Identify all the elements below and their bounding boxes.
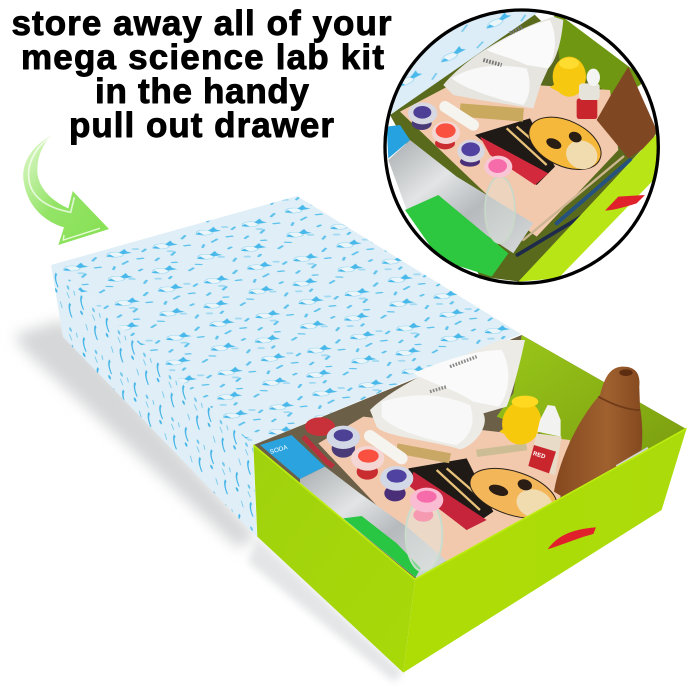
inset purple pot <box>457 140 485 167</box>
green pack <box>343 516 421 577</box>
drawer right face <box>403 428 687 673</box>
sleeve top face <box>51 196 521 445</box>
inset paint pots <box>408 102 512 178</box>
inset yellow pot <box>550 57 586 97</box>
inset white background outside drawer <box>547 172 670 290</box>
inset peach sheet <box>400 80 618 237</box>
inset volcano <box>597 67 657 158</box>
heading: pull out drawer <box>69 106 334 145</box>
inset skull <box>528 116 602 170</box>
inset pink pot <box>484 156 512 178</box>
inset paintbrushes <box>517 157 630 255</box>
inset contents <box>387 12 657 282</box>
inset blue card <box>387 125 410 158</box>
inset dark base <box>390 13 657 282</box>
inset white tube <box>445 107 473 125</box>
yellow pot <box>497 396 546 449</box>
red pot behind <box>305 417 335 436</box>
paint pots <box>327 426 443 522</box>
cotton bags <box>370 340 525 449</box>
inset green rim and face <box>518 134 662 282</box>
inset purple pot <box>408 102 437 130</box>
clear funnel <box>406 498 442 572</box>
heading: in the handy <box>95 72 310 111</box>
heading <box>12 4 392 145</box>
skull <box>464 459 563 528</box>
blue card: SODA <box>269 444 289 456</box>
arrow pointing to box <box>23 135 109 245</box>
sleeve side face <box>51 265 257 537</box>
pink pot <box>410 488 443 522</box>
red wrapper strip <box>303 437 333 467</box>
circular zoom inset <box>380 0 670 290</box>
floor shadow <box>14 320 403 682</box>
volcano <box>554 367 642 498</box>
drawer left face <box>253 445 415 673</box>
green pull-out drawer <box>253 335 687 673</box>
inset ring border <box>385 10 658 283</box>
purple pot <box>327 426 360 458</box>
dropper bottle: RED <box>532 451 547 461</box>
inset back wall <box>554 16 642 94</box>
inset red pot <box>432 121 460 149</box>
inset funnel <box>485 177 515 243</box>
inset cotton bags <box>443 17 563 108</box>
inset skeleton card <box>460 110 555 185</box>
heading: mega science lab kit <box>21 38 384 77</box>
peach sheet <box>318 417 570 562</box>
blue card <box>260 435 325 479</box>
box sleeve <box>51 196 521 537</box>
red pot <box>351 446 384 480</box>
drawer interior <box>253 335 685 579</box>
drawer back wall <box>497 335 685 453</box>
inset lid pattern <box>390 12 537 115</box>
purple pot <box>380 466 413 501</box>
inset dropper bottle <box>577 69 600 119</box>
dropper bottle <box>528 405 562 475</box>
silver pack <box>300 467 447 578</box>
red pull tab <box>548 527 596 549</box>
inset green pack <box>405 195 508 277</box>
inset red tab <box>605 195 645 211</box>
drawer rim highlight <box>253 428 687 579</box>
silver hook <box>617 448 648 467</box>
heading: store away all of your <box>12 4 392 43</box>
skeleton card <box>397 447 527 530</box>
white tube <box>370 436 402 458</box>
inset silver pack <box>388 140 533 253</box>
